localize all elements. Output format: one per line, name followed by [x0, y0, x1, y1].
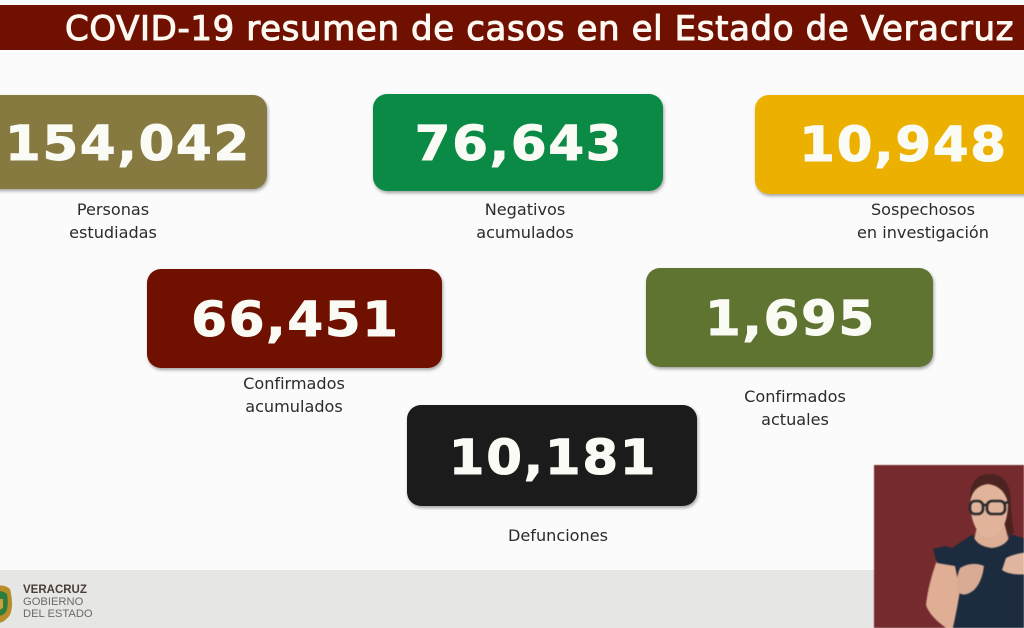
label: confirmados actuales: actuales	[761, 410, 829, 429]
stat card: confirmados actuales	[646, 268, 933, 367]
interpreter hands	[957, 564, 984, 595]
stat card: personas estudiadas: 154,042	[5, 116, 251, 172]
label: confirmados acumulados	[243, 374, 345, 416]
logo text: Veracruz Gobierno del Estado: DEL ESTADO	[23, 608, 93, 620]
title: COVID-19 resumen de casos en el Estado de Veracruz	[65, 9, 1014, 49]
stat card: defunciones	[407, 405, 697, 506]
label: defunciones: Defunciones	[508, 526, 608, 545]
stat card: negativos acumulados: 76,643	[415, 116, 623, 172]
stat card: defunciones: 10,181	[449, 430, 657, 486]
label: confirmados acumulados: Confirmados	[243, 374, 345, 393]
logo text: Veracruz Gobierno del Estado: GOBIERNO	[23, 596, 83, 608]
label: negativos acumulados: acumulados	[476, 223, 574, 242]
stat card: negativos acumulados	[373, 94, 663, 191]
title banner	[0, 5, 1024, 50]
label: sospechosos en investigación: en investigación	[857, 223, 989, 242]
interpreter neck	[973, 522, 1010, 548]
stat card: confirmados acumulados: 66,451	[191, 292, 400, 348]
logo text: Veracruz Gobierno del Estado	[23, 584, 93, 620]
label: sospechosos en investigación	[857, 200, 989, 242]
stat card: personas estudiadas	[0, 95, 267, 189]
sign language interpreter video inset	[873, 464, 1024, 628]
stat card: sospechosos en investigación	[755, 95, 1024, 194]
label: negativos acumulados: Negativos	[485, 200, 565, 219]
icon: Veracruz coat of arms	[0, 585, 12, 623]
label: confirmados acumulados: acumulados	[245, 397, 343, 416]
label: personas estudiadas: Personas	[77, 200, 149, 219]
label: sospechosos en investigación: Sospechosos	[871, 200, 975, 219]
stat card: confirmados acumulados	[147, 269, 442, 368]
stat card: confirmados actuales: 1,695	[705, 291, 876, 347]
label: personas estudiadas: estudiadas	[69, 223, 157, 242]
interpreter shirt	[933, 534, 1024, 628]
label: confirmados actuales	[744, 387, 846, 429]
interpreter arm	[926, 560, 966, 628]
label: personas estudiadas	[69, 200, 157, 242]
interpreter face	[970, 484, 1008, 538]
footer band	[0, 570, 1024, 628]
interpreter hair	[970, 474, 1014, 536]
logo text: Veracruz Gobierno del Estado: VERACRUZ	[23, 584, 87, 596]
interpreter glasses	[970, 501, 1009, 514]
label: negativos acumulados	[476, 200, 574, 242]
stat card: sospechosos en investigación: 10,948	[799, 117, 1008, 173]
label: confirmados actuales: Confirmados	[744, 387, 846, 406]
